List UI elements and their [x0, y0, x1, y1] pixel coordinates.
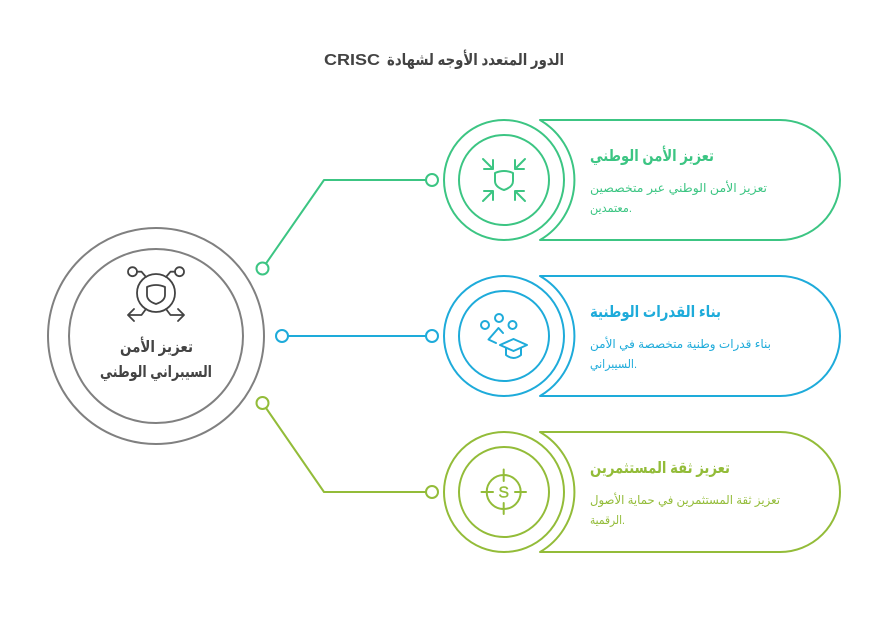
- title: CRISC: [324, 52, 381, 69]
- connector: blue: [276, 330, 438, 342]
- description: الرقمية.: [590, 513, 625, 528]
- card outline: [540, 276, 840, 396]
- panel: investor trust: [444, 432, 840, 552]
- panel: national security: [444, 120, 840, 240]
- description: تعزيز ثقة المستثمرين في حماية الأصول: [590, 492, 780, 508]
- heading: تعزيز ثقة المستثمرين: [590, 460, 730, 477]
- rings: [444, 276, 564, 396]
- connector: green: [256, 174, 438, 274]
- panel: national capabilities: [444, 276, 840, 396]
- icon: shield network: [128, 267, 184, 321]
- card outline: [540, 120, 840, 240]
- icon: dollar target: S: [498, 485, 509, 502]
- description: بناء قدرات وطنية متخصصة في الأمن: [590, 336, 771, 352]
- hub label: السيبراني الوطني: [100, 364, 212, 382]
- description: [590, 492, 780, 528]
- central hub: [48, 228, 264, 444]
- heading: تعزيز الأمن الوطني: [590, 146, 714, 166]
- connector: olive: [256, 397, 438, 498]
- title: الدور المتعدد الأوجه لشهادة: [387, 50, 564, 69]
- description: معتمدين.: [590, 201, 632, 216]
- description: تعزيز الأمن الوطني عبر متخصصين: [590, 180, 767, 196]
- hub label: [100, 337, 212, 382]
- rings: [444, 432, 564, 552]
- description: [590, 180, 767, 216]
- description: السيبراني.: [590, 357, 637, 372]
- description: [590, 336, 771, 372]
- card outline: [540, 432, 840, 552]
- hub rings: [48, 228, 264, 444]
- icon: dollar target: [482, 470, 526, 514]
- title: [324, 50, 564, 69]
- hub label: تعزيز الأمن: [120, 337, 193, 356]
- rings: [444, 120, 564, 240]
- icon: people and graduation cap: [481, 314, 527, 358]
- heading: بناء القدرات الوطنية: [590, 304, 721, 321]
- icon: shield with inward arrows: [483, 159, 525, 201]
